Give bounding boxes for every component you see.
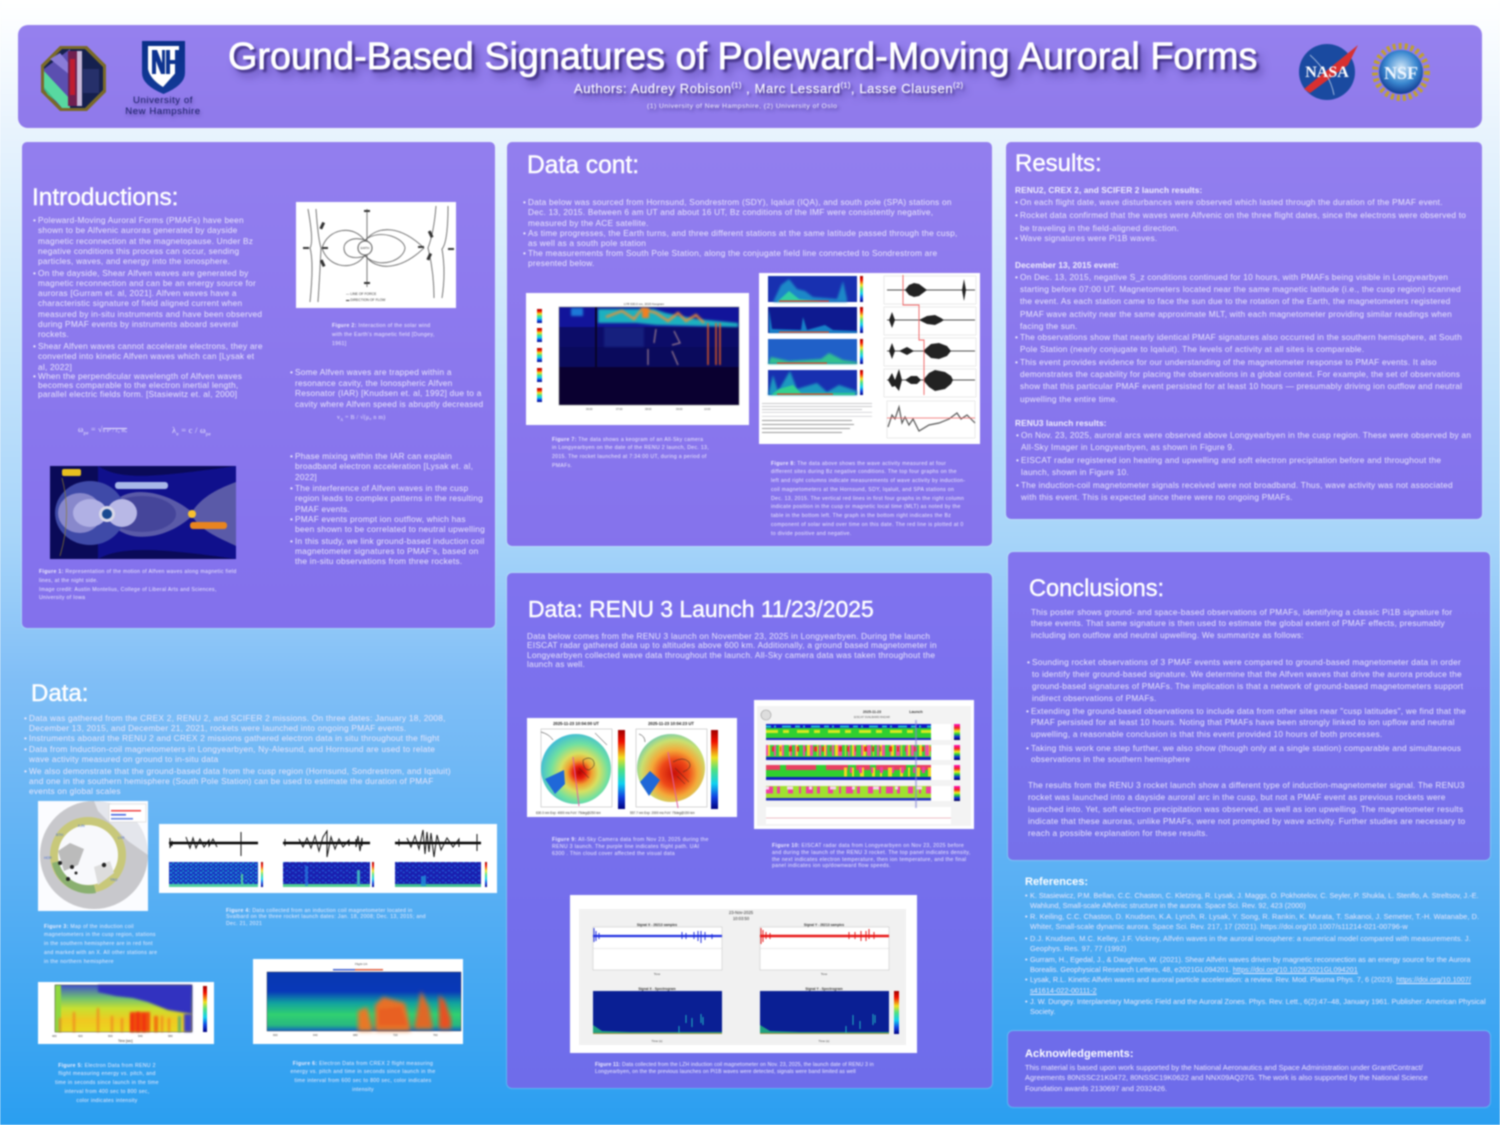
bullet list: conclusions: indirect observations of PMAFs. bbox=[1032, 693, 1157, 703]
figure 2: solar wind and magnetic field diagram: ▬ DIRECTION OF FLOW bbox=[346, 298, 386, 302]
figure 7: all-sky camera keogram: LYR 630.0 nm, 2015 Keogram bbox=[624, 302, 665, 306]
caption: figure 8: component of solar wind over time on this date. The red line is plotted at 0 bbox=[771, 522, 964, 528]
bullet list: left intro text: Shear Alfven waves cannot accelerate electrons, they are bbox=[38, 341, 263, 351]
figure 11: LZH induction coil waveforms and spectrograms: Time bbox=[821, 972, 828, 976]
figure 11: LZH induction coil waveforms and spectrograms bbox=[569, 894, 918, 1054]
list: references: Gurram, H., Egedal, J., & Daughton, W. (2021). Shear Alfvén waves driven by magnetic reconnection as an energy source for the Aurora bbox=[1030, 955, 1470, 964]
caption: figure 1: Figure 1: Representation of the motion of Alfven waves along magnetic field bbox=[39, 569, 237, 575]
bullet list: right intro text: the in-situ observations from three rockets. bbox=[295, 556, 462, 566]
bullet list: data cont text: presented below. bbox=[528, 258, 595, 268]
figure 9: all-sky camera images: 557.7 nm Exp: 2000 ms FoV: 75deg@150 km bbox=[630, 811, 695, 815]
list: references: D.J. Knudsen, M.C. Kelley, J.F. Vickrey, Alfvén waves in the auroral ionosphere: a numerical model compared with measurements. J. bbox=[1030, 934, 1471, 943]
figure 8: four-station spectrograms and waveforms bbox=[758, 272, 981, 445]
caption: figure 3: in the northern hemisphere bbox=[44, 959, 114, 965]
caption: figure 11: Longyearbyen, on the the previous launches on Pi1B waves were detected, signals were band limited as well bbox=[595, 1069, 856, 1075]
bullet list: left intro text bbox=[32, 215, 263, 400]
figure 5: electron data spectrogram: 400 bbox=[52, 1034, 57, 1038]
bullet list: left intro text: magnetic reconnection at the magnetopause. Under Bz bbox=[38, 236, 253, 246]
bullet list: data text: Data was gathered from the CREX 2, RENU 2, and SCIFER 2 missions. On three dates: January 18, 2008, bbox=[29, 713, 446, 723]
bullet list: right intro text: The interference of Alfven waves in the cusp bbox=[295, 483, 468, 493]
caption: figure 3 bbox=[43, 923, 158, 965]
bullet list: right intro text: region leads to complex patterns in the resulting bbox=[295, 493, 483, 503]
figure 6: electron data from CREX 2 bbox=[252, 958, 464, 1045]
subheading: December 13 2015 event: December 13, 2015 event: bbox=[1015, 260, 1119, 270]
bullet list: launch results: be traveling in the field-aligned direction. bbox=[1020, 223, 1179, 233]
bullet list: data cont text bbox=[522, 197, 958, 268]
bullet list: December 13 event: show that this particular PMAF event persisted for at least 10 hours — presumably driving ion outflow and neutral bbox=[1020, 381, 1462, 391]
text: RENU 3 conclusion: reach a possible explanation for these results. bbox=[1028, 828, 1208, 838]
text: conclusions intro: these events. That same signature is then used to estimate the global extent of PMAF effects, presumably bbox=[1031, 618, 1445, 628]
text: RENU 3 description: Data below comes from the RENU 3 launch on November 23, 2025 in Longyearbyen. During the launch bbox=[527, 631, 930, 641]
figure 11: LZH induction coil waveforms and spectrograms: Time bbox=[654, 972, 661, 976]
heading: Data: Data: bbox=[31, 680, 88, 707]
section: data bbox=[24, 680, 498, 1104]
icon: NSF logo bbox=[1371, 42, 1431, 102]
caption: figure 10: the next indicates electron temperature, then ion temperature, and the final bbox=[772, 857, 966, 863]
figure 5: electron data spectrogram: 580 bbox=[168, 1034, 173, 1038]
panel: header banner bbox=[18, 25, 1482, 128]
figure 10: EISCAT radar data bbox=[753, 699, 975, 830]
bullet list: RENU3 results: The induction-coil magnetometer signals received were not broadband. Thus, wave activity was not associated bbox=[1021, 480, 1453, 490]
figure 1: magnetosphere illustration bbox=[49, 465, 237, 560]
caption: figure 11: Figure 11: Data collected from the LZH induction coil magnetometer on Nov. 23, 2025, the launch date of RENU 3 in bbox=[595, 1062, 874, 1068]
figure 7: all-sky camera keogram: 08:00 bbox=[645, 407, 652, 411]
heading: RENU 3 launch: Data: RENU 3 Launch 11/23/2025 bbox=[528, 596, 874, 622]
bullet list: December 13 event: starting before 07:00 UT. Magnetometers located near the same magnetic latitude (i.e., the cusp region) scanned bbox=[1020, 284, 1461, 294]
bullet list: left intro text: rockets. bbox=[38, 329, 69, 339]
bullet list: RENU3 results: EISCAT radar registered ion heating and upwelling and soft electron precipitation before and throughout the bbox=[1021, 455, 1441, 465]
panel: conclusions bbox=[1008, 552, 1490, 860]
bullet list: December 13 event: upwelling the entire time. bbox=[1020, 394, 1118, 404]
caption: figure 6: energy vs. pitch and time in seconds since launch in the bbox=[290, 1069, 436, 1075]
bullet list: data cont text: measured by the ACE satellite. bbox=[528, 218, 649, 228]
affiliations: (1) University of New Hampshire, (2) University of Oslo bbox=[647, 103, 837, 110]
title: Ground-Based Signatures of Poleward-Moving Auroral Forms bbox=[228, 36, 1257, 78]
bullet list: right intro text: PMAF events. bbox=[295, 504, 350, 514]
figure 6: electron data from CREX 2: 600 bbox=[273, 1033, 278, 1037]
subheading: RENU3 launch results: RENU3 launch results: bbox=[1015, 418, 1107, 428]
bullet list: left intro text: parallel electric fields form. [Stasiewitz et. al, 2000] bbox=[38, 389, 237, 399]
equations: plasma frequency and inertial length: λe = c / ωpe bbox=[172, 425, 211, 438]
logo text: University of New Hampshire: University of bbox=[133, 95, 193, 106]
caption: figure 1: Image credit: Austin Montelius, College of Liberal Arts and Sciences, bbox=[39, 587, 217, 593]
caption: figure 7: Figure 7: The data shows a keogram of an All-Sky camera bbox=[552, 436, 703, 442]
figure 6: electron data from CREX 2: Flight UA bbox=[355, 962, 367, 966]
caption: figure 6: intensity bbox=[352, 1087, 374, 1093]
bullet list: December 13 event: PMAF wave activity near the same approximate MLT, with each magnetometer providing similar readings when bbox=[1020, 309, 1452, 319]
figure 3: station map: KJN bbox=[78, 824, 85, 828]
icon: NASA logo bbox=[1298, 43, 1358, 101]
icon: NSF logo: NSF bbox=[1384, 63, 1418, 83]
caption: figure 9: 6300 . Thin cloud cover affected the visual data bbox=[552, 850, 675, 856]
bullet list: right intro text: In this study, we link ground-based induction coil bbox=[295, 536, 484, 546]
text: acknowledgements: Agreements 80NSSC21K0472, 80NSSC19K0622 and NNX09AQ27G. The work is also supported by the National Science bbox=[1025, 1073, 1428, 1082]
figure 11: LZH induction coil waveforms and spectrograms: Time (s) bbox=[819, 1039, 829, 1043]
bullet list: right intro text: resonance cavity, the Ionospheric Alfven bbox=[295, 378, 452, 388]
list: references: s41614-022-00111-2 bbox=[1030, 986, 1097, 995]
caption: figure 8: Figure 8: The data above shows the wave activity measured at four bbox=[771, 460, 946, 466]
heading: Data cont: Data cont: bbox=[527, 152, 639, 178]
caption: figure 6 bbox=[290, 1060, 436, 1093]
caption: figure 8 bbox=[770, 460, 966, 537]
caption: figure 8: indicate position in the cusp or magnetic local time (MLT) as noted by the bbox=[771, 504, 961, 510]
panel: acknowledgements bbox=[1008, 1031, 1490, 1107]
bullet list: conclusions bbox=[1026, 656, 1466, 764]
bullet list: conclusions: Extending the ground-based observations to include data from other sites near "cusp latitudes", we find that the bbox=[1031, 706, 1466, 716]
bullet list: RENU3 results: All-Sky Imager in Longyearbyen, as shown in Figure 9. bbox=[1021, 442, 1235, 452]
caption: figure 10: and during the launch of the RENU 3 rocket. The top panel indicates density, bbox=[772, 850, 971, 856]
figure 10: EISCAT radar data: EISCAT SVALBARD RADAR bbox=[854, 715, 890, 719]
caption: figure 3: in the southern hemisphere are in red font bbox=[44, 941, 153, 947]
bullet list: right intro text: PMAF events prompt ion outflow, which has bbox=[295, 514, 466, 524]
figure 2: solar wind and magnetic field diagram: EARTH bbox=[361, 246, 369, 250]
caption: figure 8: table in the bottom left. The graph in the bottom right indicates the Bz bbox=[771, 513, 951, 519]
bullet list: left intro text: shown to be Alfvenic auroras generated by dayside bbox=[38, 225, 237, 235]
caption: figure 5: color indicates intensity bbox=[76, 1098, 138, 1104]
caption: figure 4: Figure 4: Data collected from an induction coil magnetometer located in bbox=[226, 908, 413, 914]
caption: figure 5: interval from 400 sec to 800 sec, bbox=[65, 1089, 149, 1095]
bullet list: RENU3 results: with this event. This is expected since there were no ongoing PMAFs. bbox=[1021, 492, 1293, 502]
figure 6: electron data from CREX 2: 640 bbox=[313, 1033, 318, 1037]
bullet list: conclusions: PMAF persisted for at least 10 hours. Noting that PMAFs have been strongly linked to ion upflow and neutral bbox=[1031, 717, 1455, 727]
bullet list: December 13 event: the event. As each station came to face the sun due to the rotation of the Earth, the magnetometers registered bbox=[1020, 296, 1450, 306]
figure 4: three magnetometer traces and spectrograms bbox=[158, 823, 498, 894]
bullet list: conclusions: upwelling, a reasonable conclusion is that this event provided 10 hours of both processes. bbox=[1031, 729, 1382, 739]
caption: figure 1: University of Iowa bbox=[39, 595, 85, 601]
icon: NASA logo: NASA bbox=[1305, 64, 1349, 81]
heading: Introductions: Introductions: bbox=[32, 184, 178, 211]
bullet list: RENU3 results: launch, shown in Figure 10. bbox=[1021, 467, 1129, 477]
figure 10: EISCAT radar data: Launch bbox=[909, 710, 923, 714]
figure 5: electron data spectrogram bbox=[37, 981, 215, 1045]
text: conclusions intro: including ion outflow and neutral upwelling. We summarize as follows: bbox=[1031, 630, 1304, 640]
list: references: Geophys. Res. 97, 77 (1992) bbox=[1030, 944, 1126, 953]
bullet list: data text bbox=[24, 713, 451, 796]
caption: figure 4: Svalbard on the three rocket launch dates: Jan. 18, 2008; Dec. 13, 2015; and bbox=[226, 914, 426, 920]
bullet list: right intro text: been shown to be correlated to neutral upwelling bbox=[295, 524, 485, 534]
caption: figure 10: Figure 10: EISCAT radar data from Longyearbyen on Nov 23, 2025 before bbox=[772, 843, 964, 849]
bullet list: data text: December 13, 2015, and December 21, 2021, rockets were launched into ongoing PMAF events. bbox=[29, 723, 406, 733]
caption: figure 8: left and right columns indicate measurements of wave activity by induction- bbox=[771, 478, 965, 484]
bullet list: left intro text: during PMAF events by instruments aboard several bbox=[38, 319, 238, 329]
figure 11: LZH induction coil waveforms and spectrograms: Signal Y - 26213 samples bbox=[804, 923, 844, 927]
text: RENU 3 description: EISCAT radar gathered data up to altitudes above 600 km. Additionally, a ground based magnetometer in bbox=[527, 640, 937, 650]
logo text: University of New Hampshire bbox=[124, 95, 202, 118]
bullet list: left intro text: characteristic signature of field aligned current when bbox=[38, 298, 242, 308]
text: acknowledgements bbox=[1025, 1063, 1428, 1094]
figure 7: all-sky camera keogram: 09:00 bbox=[676, 407, 683, 411]
bullet list: left intro text: measured by in-situ instruments and have been observed bbox=[38, 309, 262, 319]
equations: plasma frequency and inertial length bbox=[78, 425, 211, 438]
text: conclusions intro: This poster shows ground- and space-based observations of PMAFs, identifying a classic Pi1B signature for bbox=[1031, 606, 1452, 616]
bullet list: right intro text: 2022] bbox=[295, 472, 317, 482]
bullet list: RENU3 results bbox=[1016, 430, 1472, 502]
figure 6: electron data from CREX 2: 680 bbox=[353, 1033, 358, 1037]
bullet list: launch results: Wave signatures were Pi1B waves. bbox=[1020, 233, 1157, 243]
figure 2: solar wind and magnetic field diagram bbox=[295, 201, 457, 309]
figure 7: all-sky camera keogram: 10:00 bbox=[704, 407, 711, 411]
caption: figure 4: Dec. 21, 2021 bbox=[226, 921, 262, 927]
bullet list: right intro text: Resonator (IAR) [Knudsen et. al, 1992] due to a bbox=[295, 388, 482, 398]
text: RENU 3 conclusion bbox=[1028, 778, 1465, 838]
caption: figure 3: Figure 3: Map of the induction coil bbox=[44, 924, 134, 930]
caption: figure 8: Dec. 13, 2015. The vertical red lines in first four graphs in the right column bbox=[771, 496, 964, 502]
caption: figure 5: Figure 5: Electron Data from RENU 2 bbox=[58, 1062, 156, 1068]
caption: figure 5: flight measuring energy vs. pitch, and bbox=[58, 1071, 156, 1077]
caption: figure 10: panel indicates ion up/downward flow speeds. bbox=[772, 863, 891, 869]
caption: figure 5 bbox=[54, 1062, 160, 1104]
bullet list: left intro text: particles, waves, and energy into the ionosphere. bbox=[38, 256, 230, 266]
bullet list: left intro text: negative conditions this process can occur, sending bbox=[38, 246, 239, 256]
caption: figure 4 bbox=[225, 907, 426, 927]
bullet list: December 13 event: This event provides evidence for our understanding of the magnetometer response to PMAF events. It also bbox=[1020, 357, 1437, 367]
bullet list: conclusions: to identify their ground-based signature. We determine that the Alfven waves that drive the aurora produce the bbox=[1032, 669, 1462, 679]
heading: References: References: bbox=[1025, 876, 1088, 888]
bullet list: data text: Instruments aboard the RENU 2 and CREX 2 missions gathered electron data in situ throughout the flight bbox=[29, 733, 440, 743]
caption: figure 5: time in seconds since launch in the time bbox=[55, 1080, 159, 1086]
bullet list: launch results: On each flight date, wave disturbances were observed which lasted through the duration of the PMAF event. bbox=[1020, 197, 1443, 207]
panel: results bbox=[1006, 142, 1482, 519]
bullet list: launch results: Rocket data confirmed that the waves were Alfvenic on the three flight dates, since the electrons were observed to bbox=[1020, 210, 1466, 220]
figure 11: LZH induction coil waveforms and spectrograms: Signal Y - Spectrogram bbox=[805, 987, 843, 991]
bullet list: data text: Data from Induction-coil magnetometers in Longyearbyen, Ny-Alesund, and Hornsund are used to relate bbox=[29, 744, 435, 754]
bullet list: left intro text: becomes comparable to the electron inertial length, bbox=[38, 380, 238, 390]
figure 6: electron data from CREX 2: 720 bbox=[393, 1033, 398, 1037]
bullet list: launch results bbox=[1014, 197, 1466, 244]
list: references bbox=[1030, 891, 1488, 1019]
caption: figure 9: RENU 3 launch. The purple line indicates flight path. UAI bbox=[552, 844, 699, 850]
list: references: Borealis. Geophysical Research Letters, 48, e2021GL094201. https://doi.org/10.1029/2021GL094201 bbox=[1030, 965, 1358, 974]
text: RENU 3 description: Longyearbyen collected wave data throughout the launch. All-Sky camera data was taken throughout the bbox=[527, 650, 935, 660]
figure 11: LZH induction coil waveforms and spectrograms: Time (s) bbox=[652, 1039, 662, 1043]
bullet list: right intro text: Phase mixing within the IAR can explain bbox=[295, 450, 452, 460]
caption: figure 9: Figure 9: All-Sky Camera data from Nov 23, 2025 during the bbox=[552, 836, 709, 842]
bullet list: December 13 event bbox=[1014, 272, 1462, 404]
figure 7: all-sky camera keogram: 06:00 bbox=[586, 407, 593, 411]
list: references: Whiter, Small-scale dynamic aurora. Space Sci. Rev. 217, 17 (2021). https://doi.org/10.1007/s11214-021-00796-w bbox=[1030, 922, 1408, 931]
figure 11: LZH induction coil waveforms and spectrograms: 10:03:50 bbox=[733, 916, 750, 921]
caption: figure 7: PMAFs. bbox=[552, 463, 572, 469]
caption: figure 8: coil magnetometers at the Hornsund, SDY, Iqaluit, and SPA stations on bbox=[771, 487, 954, 493]
text: acknowledgements: Foundation awards 2130697 and 2032426. bbox=[1025, 1084, 1167, 1093]
panel: introductions bbox=[22, 142, 495, 628]
list: references: Society. bbox=[1030, 1007, 1055, 1016]
bullet list: conclusions: Sounding rocket observations of 3 PMAF events were compared to ground-based magnetometer data in order bbox=[1032, 656, 1461, 666]
caption: figure 6: time interval from 600 sec to 800 sec, color indicates bbox=[294, 1078, 432, 1084]
bullet list: December 13 event: facing the sun. bbox=[1020, 321, 1078, 331]
bullet list: RENU3 results: On Nov. 23, 2025, auroral arcs were observed above Longyearbyen in the cusp region. These were observed by an bbox=[1021, 430, 1471, 440]
bullet list: right intro text: Some Alfven waves are trapped within a bbox=[295, 367, 452, 377]
bullet list: conclusions: ground-based signatures of PMAFs. The implication is that a network of ground-based magnetometers support bbox=[1032, 681, 1463, 691]
logo text: University of New Hampshire: New Hampshire bbox=[125, 106, 201, 116]
bullet list: data text: We also demonstrate that the ground-based data from the cusp region (Hornsund, Sondrestrom, and Iqaluit) bbox=[29, 766, 451, 776]
list: references: K. Stasiewicz, P.M. Bellan, C.C. Chaston, C. Kletzing, R. Lysak, J. Maggs, O. Pokhotelov, C. Seyler, P. Shukla, L. Stenflo, A. Streltsov, J.-E. bbox=[1030, 891, 1479, 900]
figure 11: LZH induction coil waveforms and spectrograms: Signal X - 26213 samples bbox=[637, 923, 677, 927]
caption: figure 2 bbox=[331, 322, 435, 347]
panel: data cont bbox=[507, 142, 992, 546]
bullet list: data cont text: Dec. 13, 2015. Between 6 am UT and about 16 UT, Bz conditions of the IMF were consistently negative, bbox=[528, 207, 933, 217]
bullet list: December 13 event: Pole Station (nearly conjugate to Iqaluit). The levels of activity at all sites is comparable. bbox=[1020, 344, 1364, 354]
caption: figure 8: different sites during Bz negative conditions. The top four graphs on the bbox=[771, 469, 957, 475]
figure 2: solar wind and magnetic field diagram: — LINE OF FORCE bbox=[346, 292, 377, 296]
caption: figure 2: Figure 2: Interaction of the solar wind bbox=[332, 323, 430, 329]
figure 10: EISCAT radar data: 2025-11-23 bbox=[863, 710, 881, 714]
panel: RENU 3 launch data bbox=[507, 573, 992, 1088]
bullet list: left intro text: When the perpendicular wavelength of Alfven waves bbox=[38, 371, 242, 381]
figure 9: all-sky camera images: 2025-11-23 10:04:00 UT bbox=[553, 721, 599, 726]
text: RENU 3 description bbox=[526, 631, 937, 669]
figure 5: electron data spectrogram: 500 bbox=[108, 1034, 113, 1038]
bullet list: left intro text: auroras [Gurram et. al, 2021]. Alfven waves have a bbox=[38, 288, 237, 298]
caption: figure 7 bbox=[551, 436, 709, 469]
bullet list: right intro text bbox=[290, 367, 486, 566]
icon: UNH shield bbox=[141, 40, 186, 95]
caption: figure 11 bbox=[594, 1061, 874, 1075]
figure 9: all-sky camera images: 2025-11-23 10:04:23 UT bbox=[648, 721, 694, 726]
caption: figure 7: 2015. The rocket launched at 7:34:00 UT, during a period of bbox=[552, 454, 707, 460]
caption: figure 3: and marked with an X. All other stations are bbox=[44, 950, 157, 956]
bullet list: data cont text: The measurements from South Pole Station, along the conjugate field line connected to Sondrestrom are bbox=[528, 248, 937, 258]
bullet list: data text: wave activity measured on ground to in-situ data bbox=[29, 754, 219, 764]
caption: figure 2: 1961] bbox=[332, 341, 346, 347]
text: RENU 3 conclusion: rocket was launched into a dayside auroral arc in the cusp, but not a PMAF event as previous rockets were bbox=[1028, 792, 1446, 802]
panel: conclusions: observations in the southern hemisphere bbox=[1031, 754, 1190, 764]
figure 3: station map: HOR bbox=[44, 856, 52, 860]
figure 11: LZH induction coil waveforms and spectrograms: 23-Nov-2025 bbox=[729, 910, 754, 915]
text: RENU 3 description: launch as well. bbox=[527, 659, 585, 669]
bullet list: left intro text: On the dayside, Shear Alfven waves are generated by bbox=[38, 268, 249, 278]
bullet list: data cont text: as well as a south pole station bbox=[528, 238, 646, 248]
caption: figure 9 bbox=[551, 836, 709, 856]
authors: Authors: Audrey Robison(1) , Marc Lessard(1), Lasse Clausen(2) bbox=[574, 81, 964, 96]
bullet list: right intro text: broadband electron acceleration [Lysak et. al, bbox=[295, 461, 473, 471]
bullet list: data cont text: Data below was sourced from Hornsund, Sondrestrom (SDY), Iqaluit (IQA), and south pole (SPA) stations on bbox=[528, 197, 952, 207]
list: references: J. W. Dungey. Interplanetary Magnetic Field and the Auroral Zones. Phys. Rev. Lett., 6(2):47–48, January 1961. Publisher: American Physical bbox=[1030, 997, 1486, 1006]
bullet list: data cont text: As time progresses, the Earth turns, and three different stations at the same latitude passed through the cusp, bbox=[528, 228, 958, 238]
caption: figure 1 bbox=[38, 568, 237, 601]
caption: figure 6: Figure 6: Electron Data from CREX 2 flight measuring bbox=[293, 1060, 433, 1066]
bullet list: left intro text: al, 2022] bbox=[38, 362, 72, 372]
figure 3: station map: TRO bbox=[110, 878, 118, 882]
caption: figure 2: with the Earth's magnetic field [Dungey, bbox=[332, 332, 435, 338]
text: RENU 3 conclusion: The results from the RENU 3 rocket launch show a different type of induction-magnetometer signal. The RENU3 bbox=[1028, 780, 1465, 790]
text: RENU 3 conclusion: launched into. Yet, soft electron precipitation was observed, as well as ion upwelling. The magnetometer results bbox=[1028, 804, 1463, 814]
bullet list: right intro text: vA = B / √(μ₀ n m) bbox=[337, 415, 386, 422]
figure 5: electron data spectrogram: 420 bbox=[78, 1034, 83, 1038]
bullet list: December 13 event: The observations show that nearly identical PMAF signatures also occurred in the southern hemisphere, at South bbox=[1020, 332, 1462, 342]
list: references: Wahlund, Small-scale Alfvénic structure in the aurora. Space Sci. Rev. 92, 423 (2000) bbox=[1030, 901, 1306, 910]
bullet list: right intro text: cavity where Alfven speed is abruptly decreased bbox=[295, 398, 483, 408]
caption: figure 8: to divide positive and negative. bbox=[771, 531, 852, 537]
bullet list: data text: events on global scales bbox=[29, 786, 121, 796]
figure 7: all-sky camera keogram: 07:00 bbox=[616, 407, 623, 411]
figure 7: all-sky camera keogram bbox=[525, 292, 750, 426]
heading: Acknowledgements: Acknowledgements: bbox=[1025, 1048, 1134, 1060]
figure 9: all-sky camera images bbox=[526, 717, 738, 818]
figure 3: station map: BTH bbox=[56, 833, 63, 837]
text: RENU 3 conclusion: indicate that these auroras, unlike PMAFs, were not prompted by wave activity. Further studies are necessary to bbox=[1028, 816, 1465, 826]
list: references: Lysak, R.L. Kinetic Alfvén waves and auroral particle acceleration: a review. Rev. Mod. Plasma Phys. 7, 6 (2023). https://doi.org/10.1007/ bbox=[1030, 975, 1471, 984]
text: conclusions intro bbox=[1030, 606, 1452, 640]
bullet list: left intro text: converted into kinetic Alfven waves which can [Lysak et bbox=[38, 351, 254, 361]
figure 3: station map: LYR bbox=[118, 836, 125, 840]
figure 5: electron data spectrogram: 540 bbox=[138, 1034, 143, 1038]
caption: figure 10 bbox=[771, 842, 971, 869]
heading: Conclusions: Conclusions: bbox=[1029, 576, 1164, 602]
bullet list: data text: and one in the southern hemisphere (South Pole Station) can be used to estimate the duration of PMAF bbox=[29, 776, 434, 786]
figure 5: electron data spectrogram: Time [sec] bbox=[118, 1039, 133, 1043]
heading: Results: Results: bbox=[1015, 150, 1102, 177]
bullet list: left intro text: magnetic reconnection and can be an energy source for bbox=[38, 278, 256, 288]
section: references bbox=[1022, 875, 1492, 1021]
bullet list: left intro text: Poleward-Moving Auroral Forms (PMAFs) have been bbox=[38, 215, 244, 225]
equations: plasma frequency and inertial length: ωpe = √n e² / ε₀ mₑ bbox=[78, 425, 127, 437]
figure 3: station map bbox=[37, 800, 149, 912]
figure 6: electron data from CREX 2: 760 bbox=[433, 1033, 438, 1037]
caption: figure 7: in Longyearbyen on the date of the RENU 2 launch, Dec. 13, bbox=[552, 445, 709, 451]
figure 11: LZH induction coil waveforms and spectrograms: Signal X - Spectrogram bbox=[638, 987, 676, 991]
caption: figure 3: magnetometers in the cusp region, stations bbox=[44, 932, 156, 938]
subheading: RENU2 CREX2 SCIFER2 results: RENU2, CREX 2, and SCIFER 2 launch results: bbox=[1015, 185, 1202, 195]
icon: RENU mission patch bbox=[40, 45, 107, 112]
list: references: R. Keiling, C.C. Chaston, D. Knudsen, K.A. Lynch, R. Lysak, Y. Song, R. Rankin, K. Murata, T. Sakanoi, J. Semeter, T.-H. Watanabe, D. bbox=[1030, 912, 1479, 921]
bullet list: December 13 event: demonstrates the capability for placing the observations in a global context. For example, the set of observations bbox=[1020, 369, 1460, 379]
text: acknowledgements: This material is based upon work supported by the National Aeronautics and Space Administration under Grant/Contract/ bbox=[1025, 1063, 1423, 1072]
bullet list: conclusions: Taking this work one step further, we also show (though only at a single station) comparable and simultaneous bbox=[1031, 742, 1461, 752]
bullet list: December 13 event: On Dec. 13, 2015, negative S_z conditions continued for 10 hours, with PMAFs being visible in Longyearbyen bbox=[1020, 272, 1448, 282]
bullet list: right intro text: magnetometer signatures to PMAF's, based on bbox=[295, 546, 478, 556]
figure 9: all-sky camera images: 630.0 nm Exp: 4000 ms FoV: 75deg@250 km bbox=[536, 811, 601, 815]
caption: figure 1: lines, at the night side. bbox=[39, 578, 98, 584]
